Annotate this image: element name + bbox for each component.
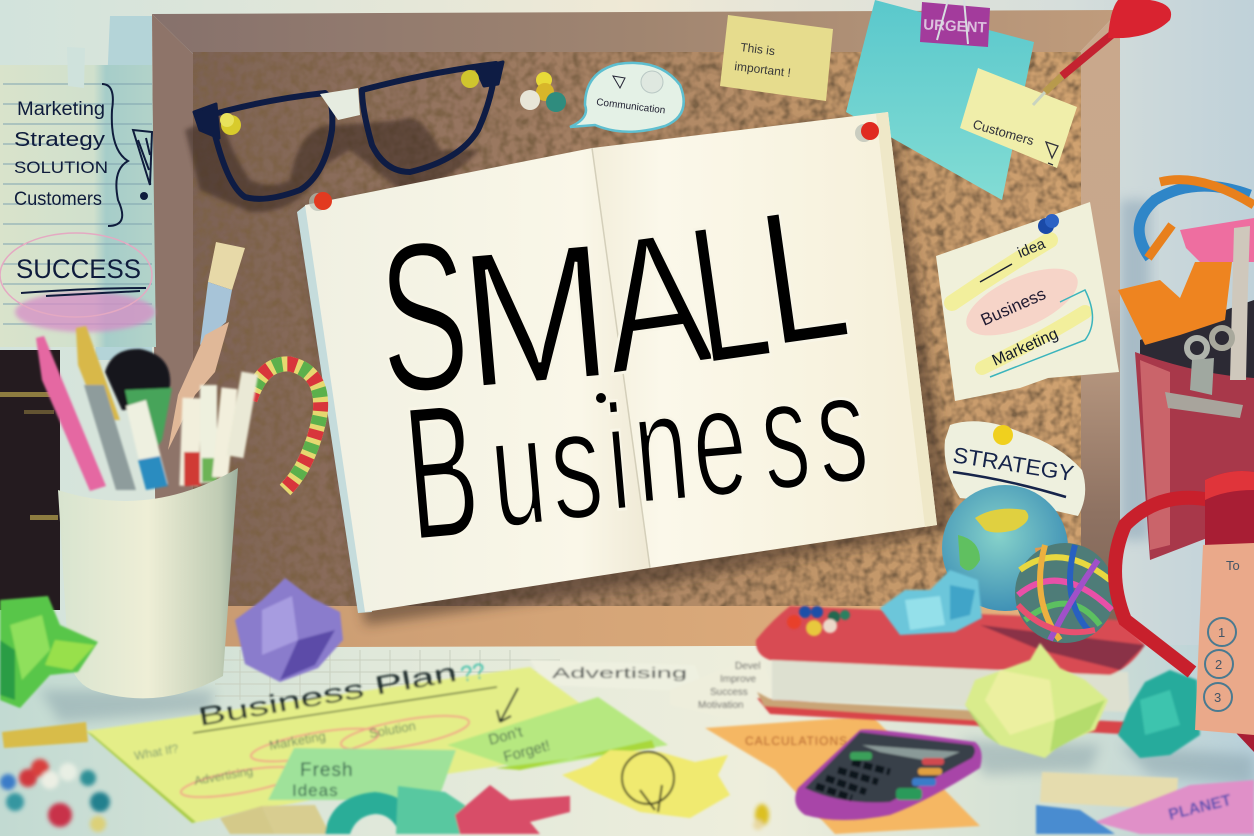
business plan yellow paper: Business Plan bbox=[196, 657, 459, 732]
orange plastic bbox=[1118, 262, 1232, 345]
title: Business: s bbox=[807, 339, 875, 517]
urgent binder clip bbox=[920, 0, 990, 47]
title: Business bbox=[397, 339, 875, 581]
title: Business: n bbox=[627, 359, 695, 537]
black marker bbox=[105, 349, 170, 410]
notebook right edge bbox=[876, 112, 937, 527]
dark pot contents bbox=[1140, 300, 1254, 385]
lightbulb note bbox=[562, 750, 730, 818]
green crumpled paper bbox=[0, 596, 98, 708]
title: Business: B bbox=[397, 363, 486, 581]
idea note: Business bbox=[978, 284, 1049, 330]
notebook shadow bbox=[300, 112, 955, 625]
exclamation mark on fold bbox=[596, 393, 606, 403]
title: SMALL: M bbox=[453, 203, 618, 429]
business plan yellow paper bbox=[86, 657, 655, 823]
highlight: idea bbox=[952, 240, 1050, 303]
pink pencil bbox=[36, 336, 106, 491]
brace bbox=[102, 84, 128, 226]
white cup bbox=[58, 468, 238, 698]
WORK letters bbox=[220, 785, 570, 834]
left note: Customers bbox=[14, 189, 102, 210]
clothes peg bbox=[2, 722, 88, 748]
title: SMALL bbox=[374, 166, 859, 438]
sticky note: customers bbox=[960, 68, 1077, 168]
handwritten notes on paper: Success bbox=[710, 687, 748, 698]
push pin cluster bbox=[520, 72, 566, 112]
book pages bbox=[772, 660, 1130, 712]
title: SMALL: L bbox=[748, 166, 859, 387]
sticky note: this is important: important ! bbox=[734, 59, 792, 80]
notebook right page bbox=[592, 112, 937, 568]
left note: SOLUTION bbox=[14, 158, 108, 177]
pink and blue papers: PLANET bbox=[1167, 792, 1233, 824]
price tag bbox=[1195, 543, 1254, 735]
yellow thumbtack bbox=[753, 804, 769, 830]
underline bbox=[21, 288, 146, 296]
idea note: idea bbox=[1015, 235, 1048, 262]
don't forget note: Don't bbox=[487, 723, 525, 749]
glasses bbox=[194, 62, 503, 199]
left note: Marketing bbox=[17, 99, 105, 120]
title: Business: i bbox=[600, 374, 635, 542]
dart bbox=[1033, 0, 1171, 105]
right pen pot bbox=[1118, 180, 1254, 560]
idea note bbox=[936, 202, 1119, 401]
notebook centre fold bbox=[592, 148, 650, 568]
handwritten notes on paper: Devel bbox=[735, 661, 761, 672]
left note: Strategy bbox=[14, 129, 105, 151]
notebook bbox=[297, 112, 937, 613]
notebook left page bbox=[305, 148, 650, 612]
calculator bbox=[795, 730, 982, 820]
business plan yellow paper: Advertising bbox=[193, 764, 254, 788]
price tag: 2 bbox=[1215, 657, 1222, 672]
desk surface bbox=[0, 645, 1254, 836]
red mug bbox=[1115, 471, 1254, 752]
title: Business: s bbox=[752, 346, 817, 524]
left note: SUCCESS bbox=[16, 254, 141, 284]
red pot bbox=[1135, 352, 1254, 560]
business plan yellow paper: What If? bbox=[133, 741, 180, 763]
desk papers bbox=[2, 655, 775, 823]
business plan yellow paper: ?? bbox=[459, 658, 487, 687]
push pins on desk bbox=[0, 759, 110, 832]
fresh ideas note bbox=[268, 748, 456, 800]
wall background bbox=[0, 0, 1254, 660]
white markers group bbox=[179, 398, 201, 486]
pin: blue on idea note bbox=[1038, 214, 1059, 234]
white marker bbox=[126, 400, 168, 490]
lower book red cover bbox=[757, 698, 1130, 734]
paint brush bbox=[168, 242, 245, 450]
cork board frame bbox=[152, 10, 1120, 647]
pink scribble bbox=[15, 292, 155, 332]
price tag: 1 bbox=[1218, 625, 1225, 640]
orange paper bbox=[705, 716, 980, 834]
wall shadow right of frame bbox=[1120, 200, 1150, 540]
glasses tape bbox=[320, 88, 360, 120]
price tag: To bbox=[1226, 558, 1240, 573]
pins on book bbox=[787, 606, 850, 636]
handwritten notes on paper: Improve bbox=[720, 674, 757, 685]
pin: red on notebook right bbox=[855, 122, 879, 142]
title: Business: s bbox=[543, 376, 609, 553]
glasses shadow bbox=[185, 115, 480, 212]
title: SMALL: A bbox=[588, 190, 721, 414]
urgent binder clip: URGENT bbox=[923, 16, 987, 37]
blue crumpled paper bbox=[880, 570, 982, 635]
grid paper on desk bbox=[215, 650, 560, 700]
highlight: marketing bbox=[982, 312, 1085, 368]
advertising note: Advertising bbox=[552, 665, 687, 682]
left note bbox=[0, 47, 156, 347]
frame: left bar bbox=[152, 14, 195, 646]
lower book cork spine bbox=[757, 692, 1000, 722]
red book cover bbox=[756, 606, 1145, 675]
title: Business: u bbox=[484, 383, 552, 561]
pin: yellow on glasses bbox=[220, 113, 241, 135]
title: SMALL: S bbox=[374, 197, 474, 438]
pin: red on notebook left bbox=[309, 192, 332, 211]
green crumpled paper ball bbox=[965, 643, 1108, 758]
cork surface bbox=[193, 52, 1081, 606]
exclamation bbox=[133, 130, 152, 185]
dark books at left bbox=[0, 350, 60, 610]
blue and orange ribbon bbox=[1139, 186, 1250, 258]
desk scene illustration: CALCULATIONS bbox=[745, 734, 848, 748]
globe bbox=[942, 485, 1068, 611]
cream eraser block bbox=[1040, 772, 1178, 810]
frame: right bar bbox=[1080, 10, 1120, 640]
business plan yellow paper: Marketing bbox=[268, 728, 327, 753]
pink and blue papers bbox=[1036, 780, 1254, 834]
paint brush in pot bbox=[1230, 226, 1250, 380]
sticky note: this is important bbox=[720, 15, 833, 101]
metal clip bbox=[1165, 328, 1243, 418]
strategy note bbox=[945, 421, 1085, 516]
teal crumpled paper bbox=[1118, 670, 1200, 758]
strategy note: STRATEGY bbox=[951, 442, 1076, 486]
frame: bottom bar bbox=[156, 605, 1120, 647]
pink plastic bbox=[1180, 218, 1254, 262]
title: SMALL: L bbox=[678, 180, 781, 406]
title: Business: e bbox=[685, 353, 753, 531]
sticky note: this is important: This is bbox=[740, 40, 776, 58]
candy cane bbox=[250, 364, 321, 490]
don't forget note bbox=[447, 697, 668, 770]
fresh ideas note: Fresh bbox=[300, 760, 354, 781]
stack of books bbox=[756, 606, 1145, 734]
pencils and markers bbox=[36, 326, 258, 491]
business plan yellow paper: Solution bbox=[368, 718, 417, 741]
idea note: Marketing bbox=[990, 326, 1061, 370]
advertising note bbox=[530, 660, 705, 692]
notebook page stack edge bbox=[297, 205, 372, 613]
highlight: business bbox=[957, 255, 1087, 349]
price tag: 3 bbox=[1214, 690, 1221, 705]
yellow pencil bbox=[76, 326, 120, 420]
don't forget note: Forget! bbox=[502, 737, 552, 766]
tape bbox=[67, 47, 85, 88]
frame: top bar bbox=[152, 10, 1120, 54]
sticky note: customers: Customers bbox=[971, 116, 1036, 148]
handwritten notes on paper bbox=[670, 655, 775, 722]
pin: yellow top of glasses bbox=[461, 70, 479, 88]
teal paper bbox=[846, 0, 1034, 200]
speech bubble: communication bbox=[570, 63, 684, 132]
green marker bbox=[125, 388, 172, 470]
wall shadow beside frame bbox=[95, 16, 152, 360]
purple crumpled paper bbox=[235, 578, 343, 682]
desk shadows bbox=[40, 690, 1254, 785]
speech bubble: communication: Communication bbox=[596, 97, 666, 116]
fresh ideas note: Ideas bbox=[292, 781, 339, 800]
handwritten notes on paper: Motivation bbox=[698, 700, 744, 711]
rubber band ball bbox=[1015, 543, 1115, 643]
